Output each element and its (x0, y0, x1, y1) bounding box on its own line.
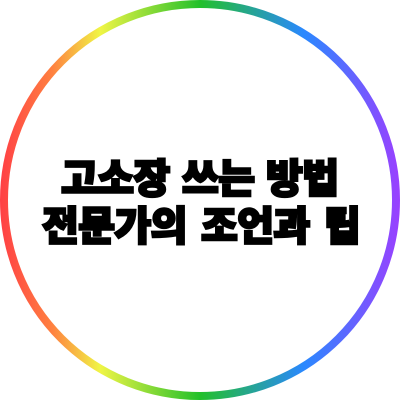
title line 1: 방법 (266, 158, 338, 202)
title line 2: 조언과 (201, 205, 310, 249)
title line 2: 전문가의 (42, 205, 187, 249)
title line 1: 고소장 (61, 158, 170, 202)
title line 2: 팁 (324, 205, 360, 249)
title line 1: 쓰는 (182, 158, 254, 202)
title (42, 158, 360, 249)
